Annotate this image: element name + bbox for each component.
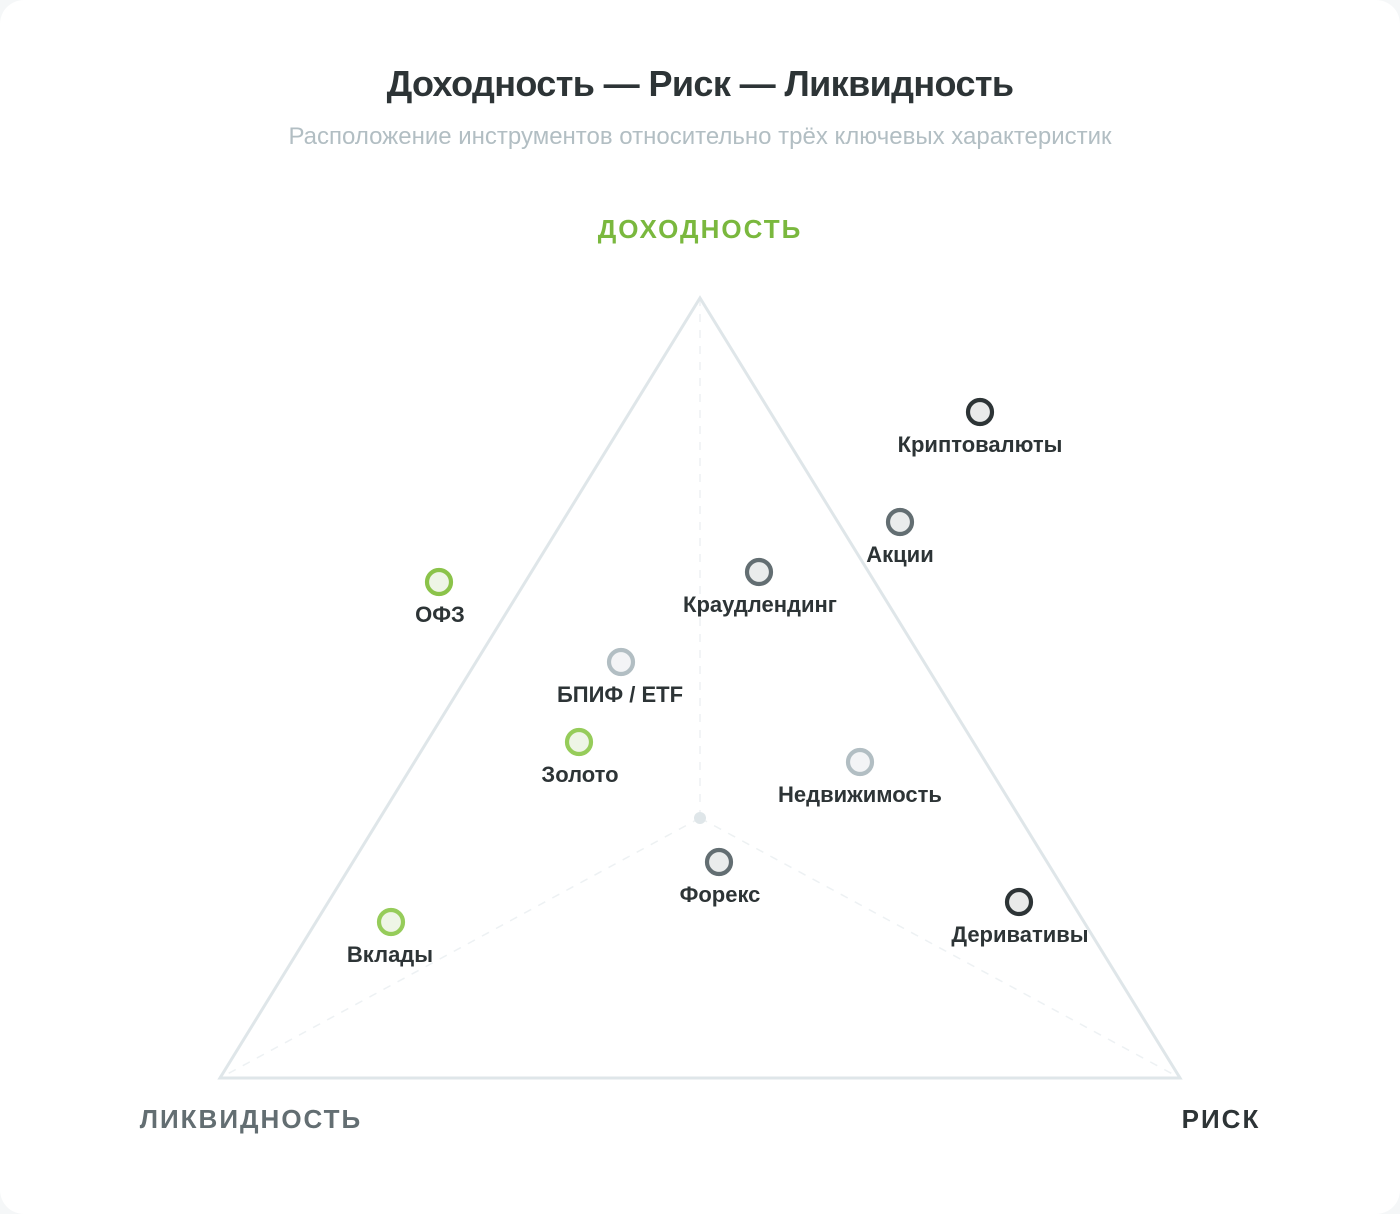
point: Краудлендинг xyxy=(683,560,837,617)
point: Золото: Золото xyxy=(541,762,619,787)
point: Недвижимость xyxy=(778,750,942,807)
point: БПИФ / ETF: БПИФ / ETF xyxy=(557,682,683,707)
point: Золото xyxy=(541,730,619,787)
point: Форекс xyxy=(680,850,760,907)
point: Криптовалюты xyxy=(898,400,1062,457)
point: БПИФ / ETF xyxy=(557,650,683,707)
point: Форекс: Форекс xyxy=(680,882,760,907)
point: Вклады xyxy=(347,910,433,967)
point: Акции xyxy=(866,510,934,567)
point: Недвижимость: Недвижимость xyxy=(778,782,942,807)
axis label: ликвидность: ЛИКВИДНОСТЬ xyxy=(140,1104,362,1134)
title: Доходность — Риск — Ликвидность xyxy=(387,63,1013,104)
point: ОФЗ: ОФЗ xyxy=(415,602,465,627)
axes to centre xyxy=(220,298,1180,1078)
point: Деривативы: Деривативы xyxy=(951,922,1089,947)
point: Акции: Акции xyxy=(866,542,934,567)
point: Краудлендинг: Краудлендинг xyxy=(683,592,837,617)
point: Деривативы xyxy=(951,890,1089,947)
point: ОФЗ xyxy=(415,570,465,627)
point: Криптовалюты: Криптовалюты xyxy=(898,432,1062,457)
point: Вклады: Вклады xyxy=(347,942,433,967)
triangle xyxy=(220,298,1180,1078)
axis label: доходность: ДОХОДНОСТЬ xyxy=(598,214,802,244)
axis label: риск: РИСК xyxy=(1182,1104,1260,1134)
centre dot xyxy=(694,812,706,824)
subtitle: Расположение инструментов относительно трёх ключевых характеристик xyxy=(288,123,1112,150)
